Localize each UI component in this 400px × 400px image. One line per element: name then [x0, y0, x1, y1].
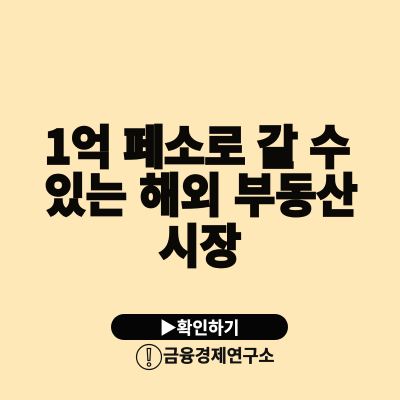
- title: 1억 페소로 갈 수: [44, 110, 350, 177]
- icon: exclamation circle: [136, 344, 162, 370]
- title: 시장: [159, 209, 241, 276]
- title: [44, 110, 358, 276]
- title: 있는 해외 부동산: [44, 158, 358, 225]
- button label: ▶확인하기: [160, 314, 239, 339]
- brand name: 금융경제연구소: [163, 343, 274, 368]
- button: confirm: [111, 314, 288, 340]
